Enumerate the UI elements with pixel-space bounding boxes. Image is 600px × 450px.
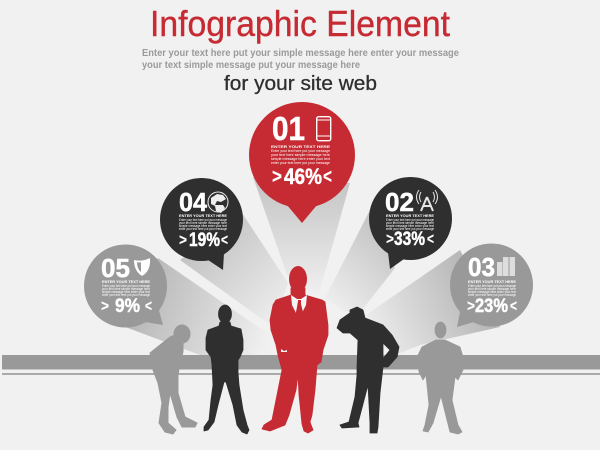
icon: radio tower <box>416 190 438 211</box>
intro text <box>142 47 459 71</box>
bubble 01: ENTER YOUR TEXT HERE <box>271 145 331 149</box>
bubble 02: enter your text here put your message <box>386 227 434 231</box>
bubble 05: 05 <box>101 253 130 283</box>
bubble 01: Enter your text here put your message <box>271 149 330 153</box>
bubble 04 <box>160 178 243 270</box>
bubble 01: 46% <box>284 164 322 189</box>
bubble 03: your text here simple message here <box>468 287 516 291</box>
icon: globe <box>208 192 228 213</box>
bubble 01: enter your text here put your message <box>271 161 330 165</box>
subtitle: for your site web <box>224 73 377 95</box>
floor bar <box>2 355 600 375</box>
pocket hand <box>281 349 287 352</box>
title: Infographic Element <box>150 3 450 44</box>
silhouette: red businessman <box>262 266 328 433</box>
bubble 02: your text here simple message here <box>386 221 434 225</box>
bubble 03: 23% <box>475 296 508 317</box>
bubble 05: enter your text here put your message <box>102 293 150 297</box>
bubble 04: enter your text here put your message <box>179 227 227 231</box>
silhouette: grey man hands on hips <box>417 322 463 434</box>
bubble 03: simple message here enter your text <box>468 290 516 294</box>
bubble 04: > <box>179 232 187 249</box>
bubble 03 <box>450 244 533 327</box>
bubble 04: your text here simple message here <box>179 221 227 225</box>
bubble 01: < <box>323 166 332 188</box>
bubble 01 <box>249 102 355 223</box>
light rays <box>120 177 500 355</box>
intro text: your text simple message put your message here <box>142 59 360 71</box>
bubble 05: your text here simple message here <box>102 287 150 291</box>
intro text: Enter your text here put your simple message here enter your message <box>142 47 459 59</box>
bubble 04: Enter your text here put your message <box>179 218 227 222</box>
bubble 02: > <box>386 231 394 248</box>
bubble 01: 01 <box>272 110 305 147</box>
silhouette: grey man leaning, left <box>150 325 197 434</box>
bubble 04: 19% <box>189 230 220 251</box>
bubble 03: Enter your text here put your message <box>468 284 516 288</box>
bubble 04: ENTER YOUR TEXT HERE <box>179 214 227 218</box>
bubble 04: < <box>221 232 228 249</box>
bubble 02: simple message here enter your text <box>386 224 434 228</box>
bubble 05: > <box>101 298 109 315</box>
icon: buildings <box>497 257 515 276</box>
bubble 04: 04 <box>179 187 208 217</box>
icon: shield <box>134 258 150 276</box>
silhouette: dark man arms crossed <box>204 305 249 434</box>
bubble 03: enter your text here put your message <box>468 293 516 297</box>
bubble 02: < <box>427 231 434 248</box>
bubble 03: 03 <box>468 252 495 282</box>
bubble 05: < <box>145 298 152 315</box>
bubble 02: ENTER YOUR TEXT HERE <box>386 214 434 218</box>
bubble 02: 33% <box>394 229 425 250</box>
bubble 04: simple message here enter your text <box>179 224 227 228</box>
bubble 02 <box>369 177 452 269</box>
bubble 01: your text here simple message here <box>271 153 330 157</box>
bubble 05: Enter your text here put your message <box>102 284 150 288</box>
bubble 05 <box>84 244 167 328</box>
bubble 02: Enter your text here put your message <box>386 218 434 222</box>
bubble 05: simple message here enter your text <box>102 290 150 294</box>
bubble 01: > <box>272 166 282 188</box>
shirt and tie <box>291 295 307 316</box>
bubble 03: > <box>467 298 475 315</box>
bubble 03: ENTER YOUR TEXT HERE <box>468 280 516 284</box>
bubble 02: 02 <box>385 187 414 217</box>
bubble 01: simple message here enter your text <box>271 157 330 161</box>
silhouette: dark man scratching head <box>337 307 399 433</box>
bubble 05: 9% <box>115 296 140 317</box>
icon: smartphone <box>317 117 331 141</box>
bubble 03: < <box>510 298 517 315</box>
bubble 05: ENTER YOUR TEXT HERE <box>102 280 150 284</box>
